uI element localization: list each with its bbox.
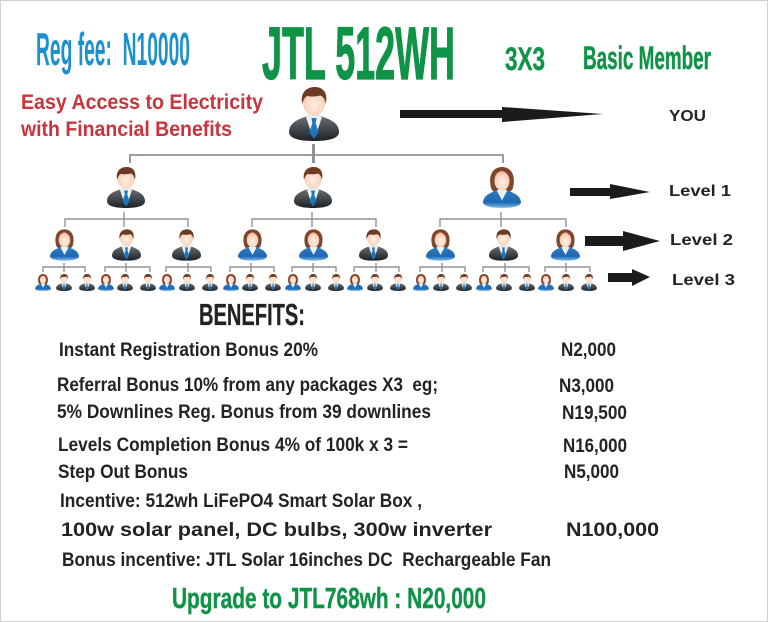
level 1 members [107, 167, 521, 208]
tree connectors [43, 144, 590, 272]
benefits list [57, 340, 659, 571]
arrow: you [400, 107, 603, 122]
tagline [20, 91, 263, 141]
benefits list: Instant Registration Bonus 20% [59, 340, 318, 361]
infographic canvas: JTL 512WH [262, 12, 455, 95]
upgrade call to action: Upgrade to JTL768wh : N20,000 [172, 583, 486, 615]
benefits list: N3,000 [559, 376, 614, 397]
tagline: with Financial Benefits [20, 118, 232, 141]
benefits list: N5,000 [564, 462, 619, 483]
benefits list: Step Out Bonus [58, 462, 188, 483]
infographic canvas: Reg fee: N10000 [36, 23, 190, 75]
benefits list: N100,000 [566, 519, 659, 541]
benefits list: 5% Downlines Reg. Bonus from 39 downlines [57, 402, 431, 423]
label: you: YOU [669, 108, 706, 125]
benefits heading: BENEFITS: [199, 297, 305, 332]
tagline: Easy Access to Electricity [21, 91, 263, 114]
label: level 3: Level 3 [672, 272, 735, 289]
benefits list: N19,500 [562, 403, 627, 424]
benefits list: Levels Completion Bonus 4% of 100k x 3 = [58, 435, 408, 456]
arrow: level 1 [570, 184, 650, 199]
level 2 members [50, 229, 580, 261]
benefits list: N16,000 [563, 436, 627, 457]
benefits list: Referral Bonus 10% from any packages X3 eg; [57, 375, 438, 396]
arrow: level 3 [608, 269, 650, 286]
you: root member [289, 87, 339, 141]
benefits list: 100w solar panel, DC bulbs, 300w inverter [61, 519, 492, 541]
benefits list: Bonus incentive: JTL Solar 16inches DC Rechargeable Fan [62, 550, 551, 571]
label: level 1: Level 1 [669, 183, 731, 200]
benefits list: N2,000 [561, 340, 616, 361]
arrow: level 2 [585, 231, 660, 251]
plan matrix: 3X3 [505, 41, 545, 77]
level 3 members [35, 274, 597, 291]
label: level 2: Level 2 [670, 232, 733, 249]
benefits list: Incentive: 512wh LiFePO4 Smart Solar Box , [60, 491, 422, 512]
